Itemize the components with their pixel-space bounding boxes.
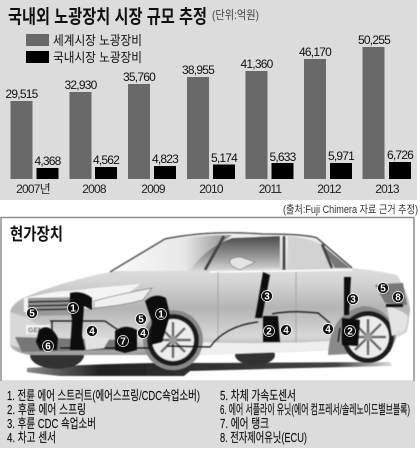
bar chart: world and domestic market 2007-2013: 35,760 — [123, 70, 156, 84]
legend: 국내시장 노광장비 — [53, 50, 142, 65]
icon: part 5 acceleration sensor marker: 5 — [380, 284, 386, 294]
icon: part 4 height sensor marker — [322, 324, 334, 336]
icon: part 4 height sensor marker: 4 — [325, 324, 331, 336]
bar chart: world and domestic market 2007-2013: 2012 — [317, 182, 342, 196]
icon: part 4 height sensor marker: 4 — [140, 328, 146, 340]
chart title: 국내외 노광장치 시장 규모 추정 — [8, 6, 207, 28]
icon: part 5 acceleration sensor marker — [378, 282, 388, 294]
icon: part 3 rear shock absorber marker: 3 — [264, 292, 270, 302]
legend: 세계시장 노광장비 — [53, 33, 142, 48]
panel: suspension diagram — [1, 218, 414, 382]
bar chart: world and domestic market 2007-2013: 5,971 — [328, 149, 355, 163]
icon: part 5 acceleration sensor marker — [136, 314, 146, 326]
bar chart: world and domestic market 2007-2013: 2009 — [141, 182, 166, 196]
icon: part 2 rear air spring marker — [264, 326, 274, 338]
bar chart: world and domestic market 2007-2013: 2011 — [259, 182, 282, 196]
illustration: car with suspension parts: GENE — [28, 328, 48, 334]
legend item 7: 7. 에어 탱크 — [220, 416, 269, 431]
bar chart: world and domestic market 2007-2013: 4,368 — [34, 154, 62, 168]
bar chart: world and domestic market 2007-2013: 5,633 — [269, 150, 297, 164]
bar chart: world and domestic market 2007-2013: 41,360 — [241, 57, 274, 71]
icon: part 1 front air strut marker — [68, 302, 78, 314]
icon: part 4 height sensor marker — [86, 326, 98, 338]
icon: part 5 acceleration sensor marker: 5 — [138, 314, 144, 326]
icon: part 4 height sensor marker — [280, 324, 292, 336]
bar chart: world and domestic market 2007-2013: 50,255 — [358, 33, 391, 47]
panel: market size chart — [0, 0, 417, 200]
icon: part 3 rear shock absorber marker — [262, 290, 272, 302]
icon: part 6 air supply unit marker: 6 — [45, 342, 51, 352]
icon: part 1 front air strut marker: 1 — [70, 304, 76, 314]
bar chart: world and domestic market 2007-2013: 2010 — [199, 182, 224, 196]
icon: part 6 air supply unit marker — [42, 340, 54, 352]
icon: part 3 rear shock absorber marker — [348, 294, 358, 306]
icon: part 7 air tank marker: 7 — [120, 336, 126, 348]
bar chart: world and domestic market 2007-2013: 46,170 — [299, 45, 332, 59]
panel: parts legend — [0, 381, 415, 448]
icon: part 8 ECU marker: 8 — [395, 292, 401, 304]
bar chart: world and domestic market 2007-2013: 32,930 — [65, 78, 98, 92]
bar chart: world and domestic market 2007-2013: 6,726 — [387, 148, 414, 162]
suspension parts and wiring — [36, 272, 403, 353]
icon: part 2 rear air spring marker: 2 — [266, 326, 272, 338]
bar chart: world and domestic market 2007-2013: 4,562 — [93, 153, 120, 167]
bar chart: world and domestic market 2007-2013 — [6, 33, 414, 196]
legend item 3: 3. 후륜 CDC 쇽업소버 — [7, 416, 96, 431]
legend item 8: 8. 전자제어유닛(ECU) — [220, 430, 307, 445]
bar chart: world and domestic market 2007-2013: 29,515 — [6, 87, 39, 101]
legend item 5: 5. 차체 가속도센서 — [220, 388, 296, 403]
illustration: car with suspension parts — [10, 231, 410, 376]
icon: part 5 acceleration sensor marker — [26, 308, 38, 320]
icon: part 5 acceleration sensor marker: 5 — [29, 308, 35, 320]
icon: part 7 air tank marker — [118, 336, 128, 348]
legend item 2: 2. 후륜 에어 스프링 — [7, 402, 86, 417]
bar chart: world and domestic market 2007-2013: 2013 — [375, 182, 400, 196]
bar chart: world and domestic market 2007-2013: 4,823 — [152, 152, 179, 166]
icon: part 4 height sensor marker — [138, 328, 148, 340]
icon: part 4 height sensor marker: 4 — [283, 326, 289, 336]
legend item 4: 4. 차고 센서 — [7, 430, 56, 445]
unit note: (단위:억원) — [212, 8, 259, 22]
heading: 현가장치 — [10, 225, 63, 244]
icon: part 2 rear air spring marker — [344, 326, 356, 338]
bar chart: world and domestic market 2007-2013: 5,174 — [211, 151, 238, 165]
bar chart: world and domestic market 2007-2013: 2007년 — [16, 182, 50, 196]
icon: part 1 front air strut marker: 1 — [158, 310, 164, 320]
bar chart: world and domestic market 2007-2013: 2008 — [82, 182, 107, 196]
icon: part 1 front air strut marker — [156, 308, 166, 320]
icon: part 4 height sensor marker: 4 — [89, 326, 95, 338]
icon: part 8 ECU marker — [392, 292, 404, 304]
icon: part 3 rear shock absorber marker: 3 — [350, 294, 356, 306]
icon: part 2 rear air spring marker: 2 — [347, 326, 353, 338]
legend — [26, 33, 142, 65]
bar chart: world and domestic market 2007-2013: 38,955 — [182, 63, 215, 77]
legend item 1: 1. 전륜 에어 스트러트(에어스프링/CDC쇽업소버) — [7, 388, 200, 403]
